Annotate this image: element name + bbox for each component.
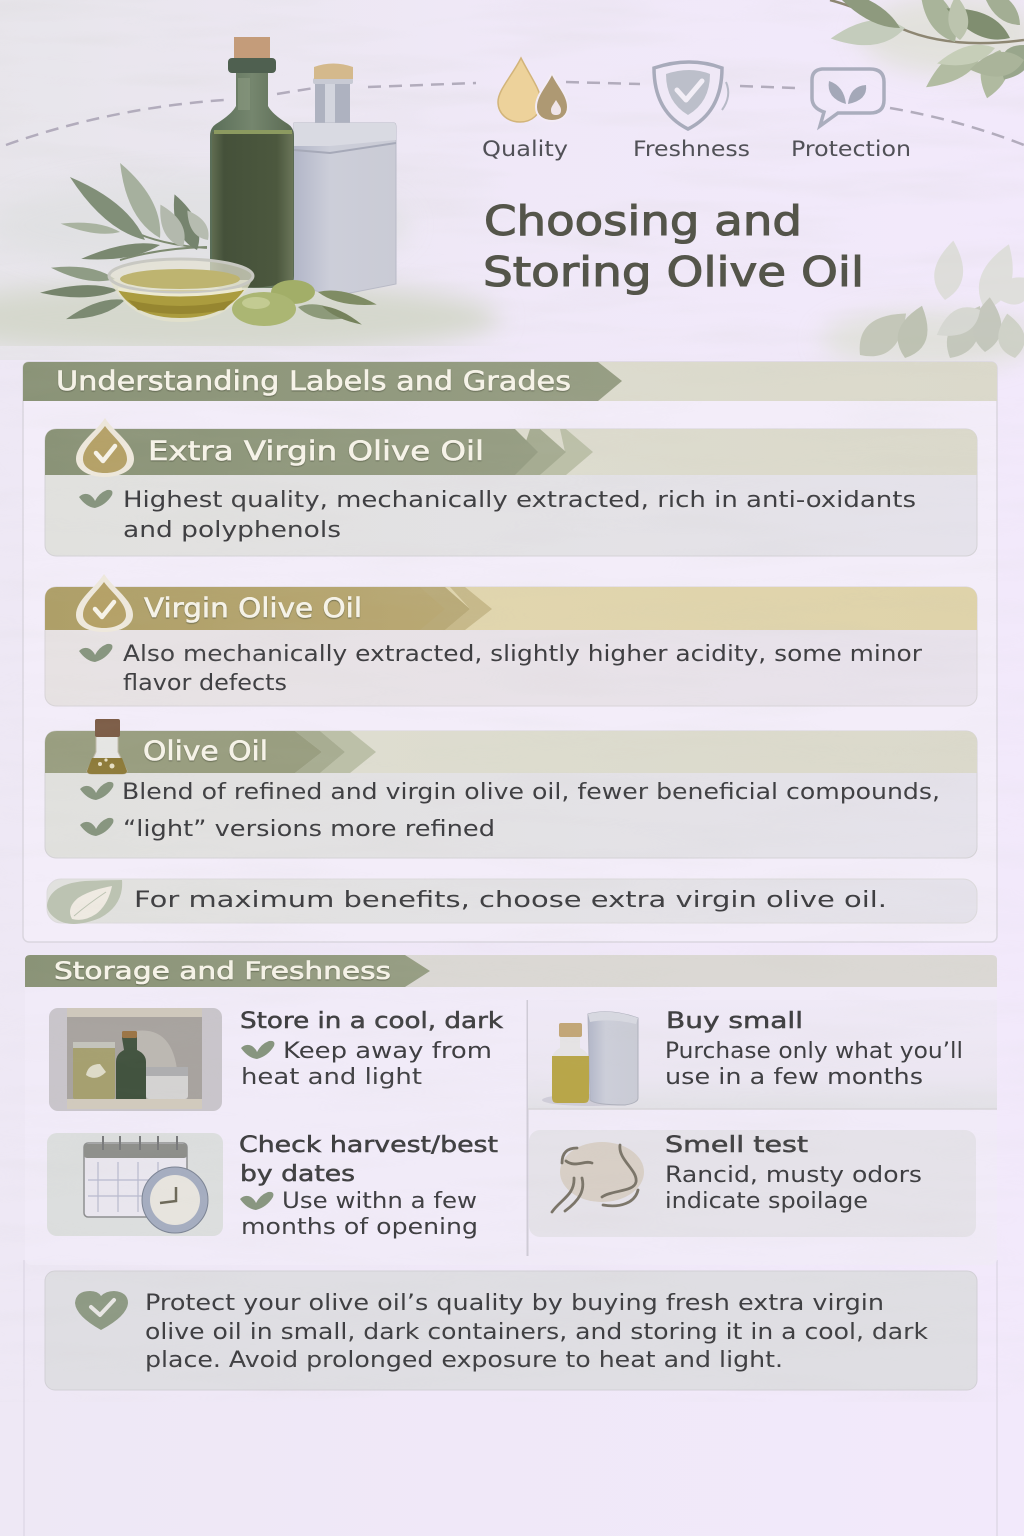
summary text: place. Avoid prolonged exposure to heat and light. <box>145 1348 783 1373</box>
text: by dates <box>240 1162 355 1187</box>
header illustration: oil bottles, bowl, olives and leaves <box>40 37 396 328</box>
item: buy small <box>542 1009 963 1106</box>
illustration: small bottle and tin <box>542 1012 638 1106</box>
text: months of opening <box>241 1215 478 1240</box>
section heading ribbon: Storage and Freshness <box>54 957 391 985</box>
icon: protection speech bubble <box>812 69 884 126</box>
icon: gold drop badge <box>76 418 134 477</box>
description: flavor defects <box>123 671 287 696</box>
panel: storage and freshness <box>25 955 997 1265</box>
item: check dates <box>47 1133 498 1240</box>
check marks <box>80 782 113 836</box>
icon: freshness shield <box>654 62 728 129</box>
icon labels: Quality <box>482 137 568 161</box>
text <box>665 1133 922 1214</box>
icon: gold drop badge <box>76 574 133 632</box>
text: Check harvest/best <box>239 1133 498 1158</box>
illustration: calendar and clock <box>47 1133 223 1236</box>
icon: small oil flask <box>87 719 127 774</box>
title: Choosing and <box>484 197 802 245</box>
icon labels: Freshness <box>633 137 750 161</box>
summary text: olive oil in small, dark containers, and storing it in a cool, dark <box>145 1320 928 1345</box>
text: Purchase only what you’ll <box>665 1039 963 1064</box>
icon labels: Protection <box>791 137 911 161</box>
olive branch behind bottles <box>40 158 214 325</box>
description: Highest quality, mechanically extracted, rich in anti-oxidants <box>123 488 916 513</box>
callout: choose extra virgin <box>47 879 977 924</box>
icon: check badge <box>75 1291 128 1330</box>
title: Storing Olive Oil <box>483 248 864 296</box>
text: Rancid, musty odors <box>665 1163 922 1188</box>
card: olive oil <box>45 719 977 858</box>
olives and front leaves <box>232 280 378 328</box>
illustration: scent swirls <box>552 1142 644 1212</box>
panel: understanding labels and grades <box>23 362 997 942</box>
item: smell test <box>529 1130 976 1237</box>
panel: summary <box>45 1271 977 1390</box>
description <box>123 488 916 543</box>
card: virgin olive oil: Virgin Olive Oil <box>144 593 362 624</box>
description: Also mechanically extracted, slightly higher acidity, some minor <box>123 642 923 667</box>
text: heat and light <box>241 1065 422 1090</box>
text: indicate spoilage <box>665 1189 868 1214</box>
description <box>122 780 940 842</box>
icon labels <box>482 137 911 161</box>
check mark <box>79 644 112 662</box>
section heading ribbon <box>25 955 997 987</box>
dashed connector line <box>6 82 1024 145</box>
text: Store in a cool, dark <box>240 1009 503 1034</box>
foliage: top right corner <box>826 0 1024 102</box>
title <box>483 197 864 296</box>
glass bowl of oil <box>109 259 253 322</box>
text: Buy small <box>666 1009 803 1034</box>
green bottle <box>210 37 294 288</box>
description: “light” versions more refined <box>123 817 495 842</box>
tin <box>294 64 396 296</box>
text: Use withn a few <box>282 1189 477 1214</box>
card: extra virgin olive oil <box>45 418 977 556</box>
description <box>123 642 923 696</box>
text <box>239 1133 498 1240</box>
text <box>665 1009 963 1090</box>
text <box>240 1009 503 1090</box>
foliage: bottom right corner <box>820 239 1024 370</box>
text: Smell test <box>665 1133 808 1158</box>
text: Keep away from <box>283 1039 492 1064</box>
section heading ribbon: Understanding Labels and Grades <box>56 366 571 397</box>
summary text: Protect your olive oil’s quality by buying fresh extra virgin <box>145 1291 884 1316</box>
callout: choose extra virgin: For maximum benefits, choose extra virgin olive oil. <box>134 888 887 913</box>
icon: quality oil drops <box>498 58 568 122</box>
icon: leaf badge <box>47 880 122 924</box>
check mark <box>79 490 112 508</box>
card: virgin olive oil <box>45 574 977 706</box>
section heading ribbon <box>23 362 997 401</box>
text: use in a few months <box>665 1065 923 1090</box>
card: olive oil: Olive Oil <box>143 736 268 767</box>
illustration: shelf with containers <box>49 1008 222 1111</box>
summary text <box>145 1291 928 1373</box>
description: and polyphenols <box>123 518 341 543</box>
description: Blend of refined and virgin olive oil, fewer beneficial compounds, <box>122 780 940 805</box>
item: store in a cool dark place <box>49 1008 503 1111</box>
card: extra virgin olive oil: Extra Virgin Olive Oil <box>148 436 484 467</box>
